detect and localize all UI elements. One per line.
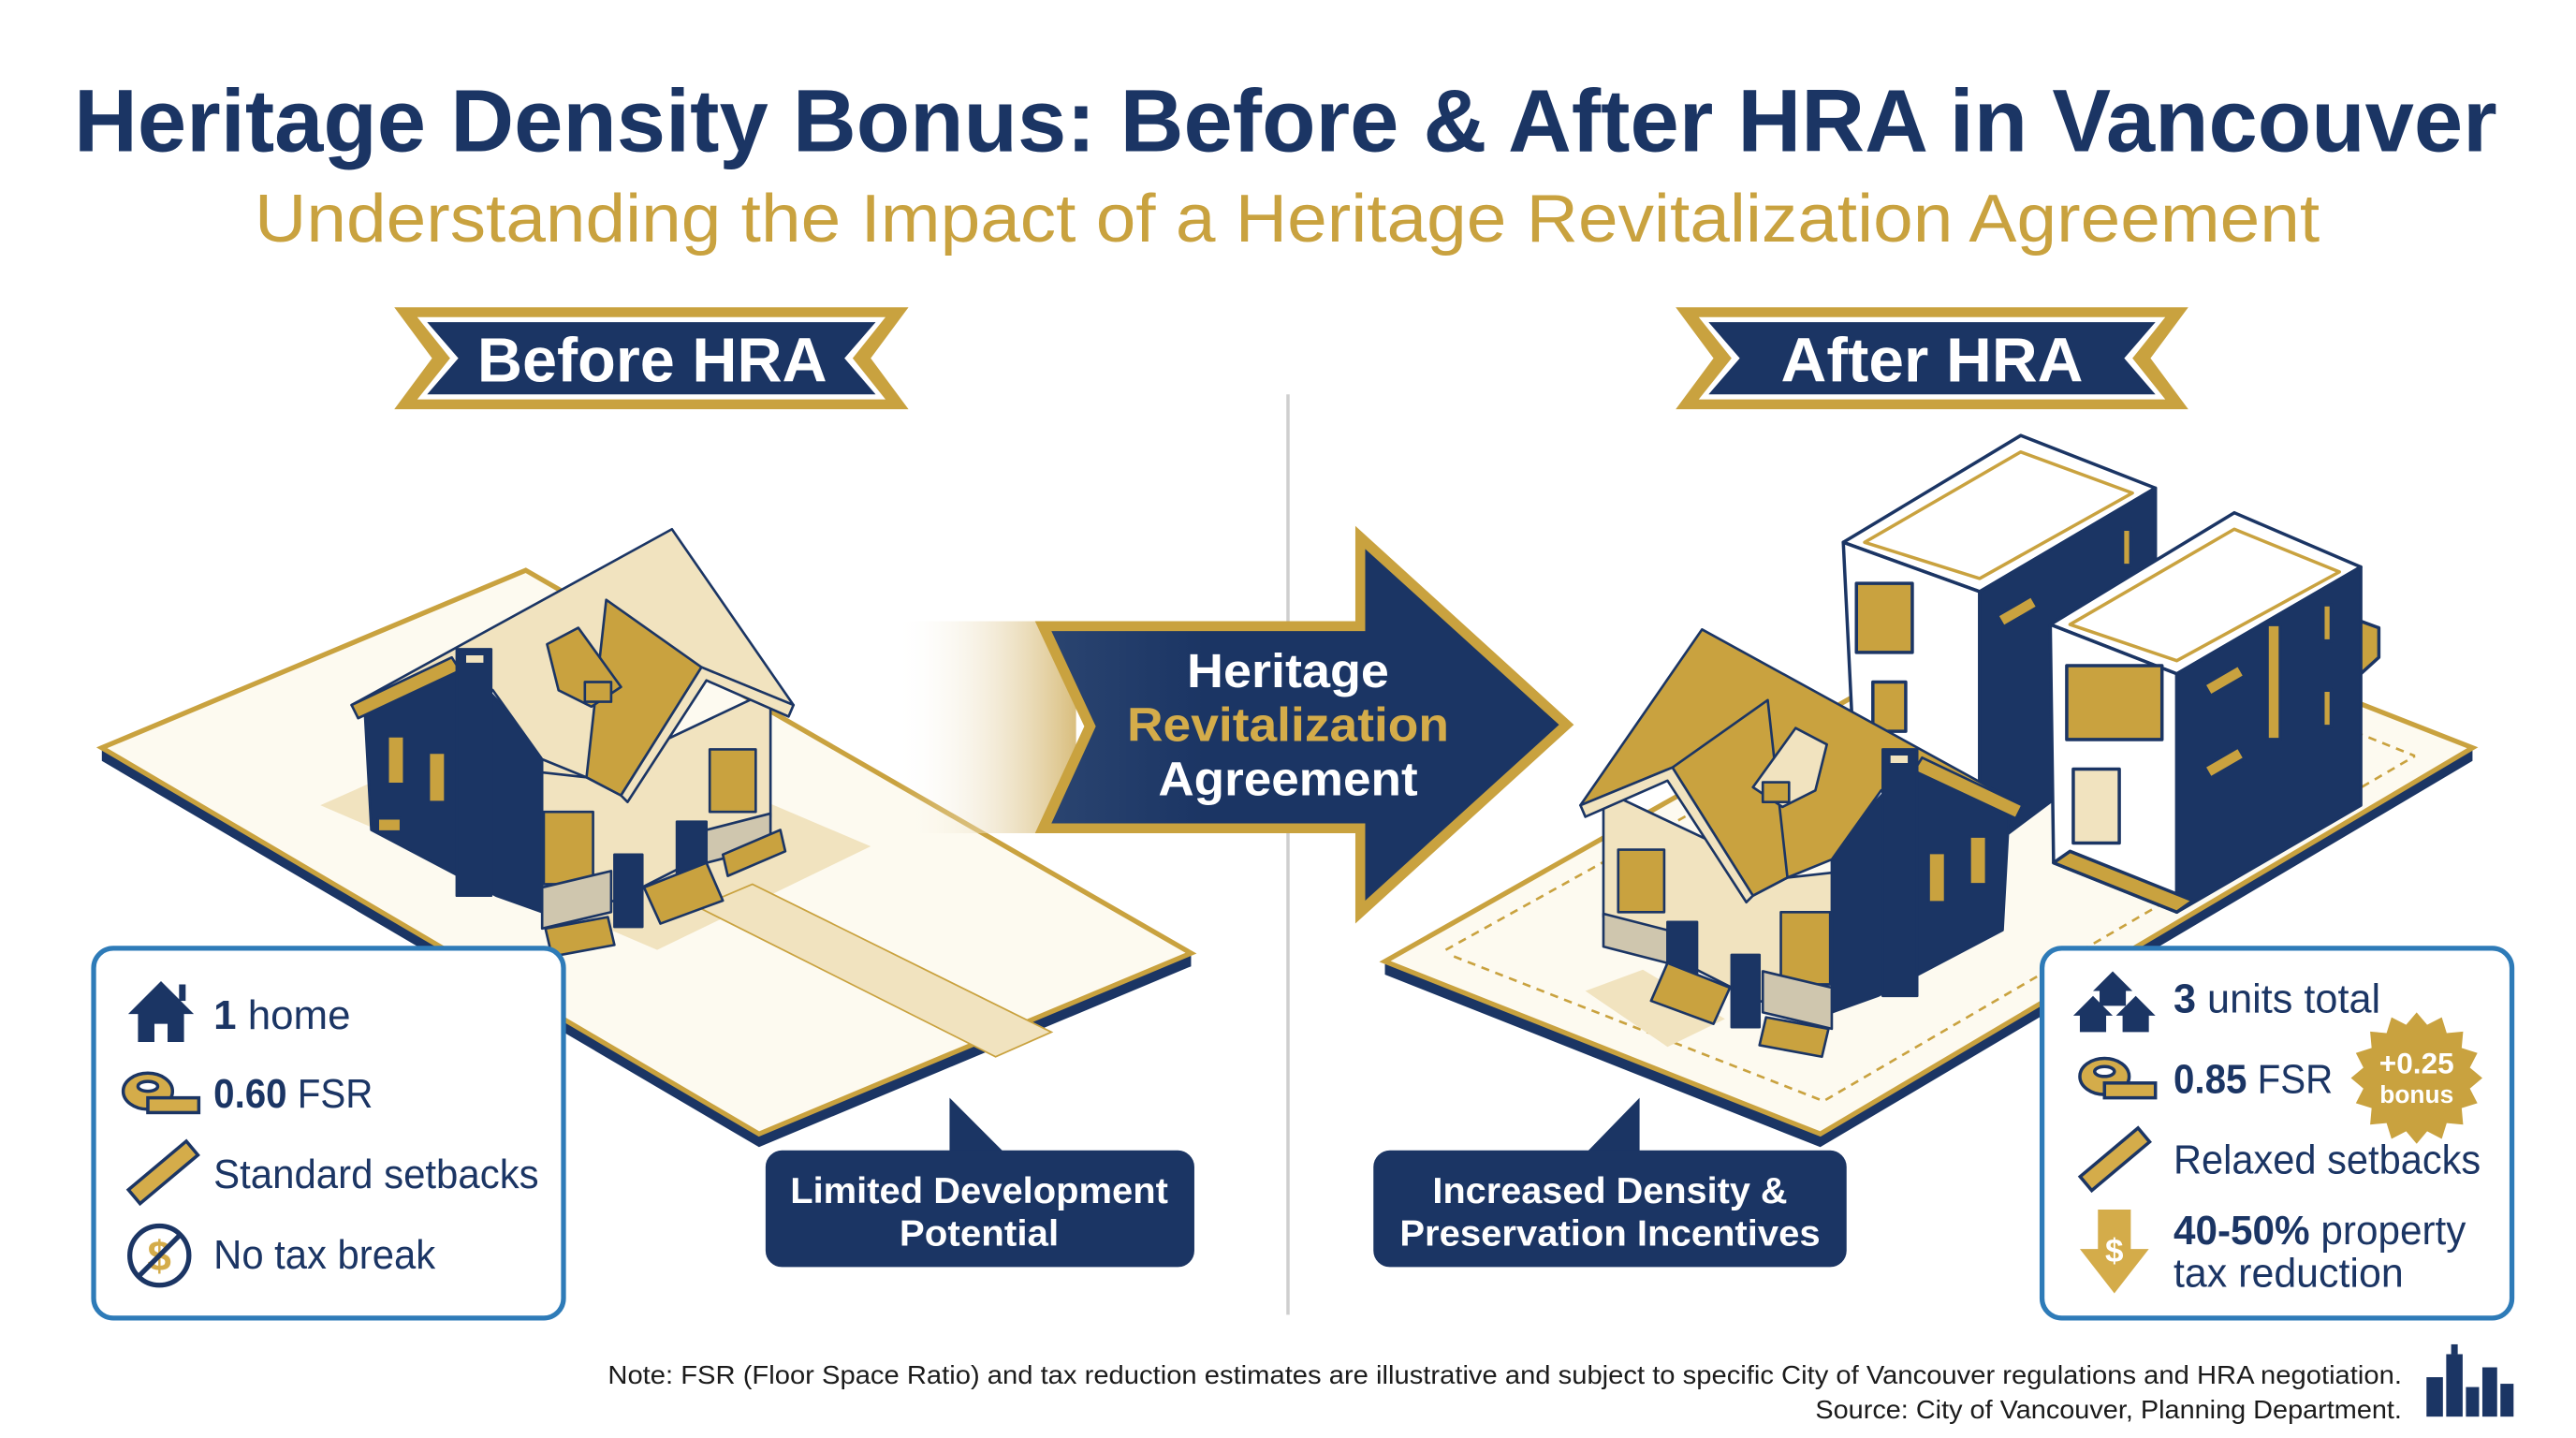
arrow: heritage revitalization agreement: Heritage: [1187, 644, 1389, 697]
icon: preserved heritage house: [1580, 629, 2023, 1057]
panel: after stats: Relaxed setbacks: [2174, 1137, 2481, 1182]
icon: modern infill buildings: [1843, 435, 2378, 912]
icon: tape measure: [124, 1073, 198, 1112]
panel: after lot illustration: [1385, 435, 2472, 1147]
footer note: Source: City of Vancouver, Planning Department.: [1815, 1395, 2402, 1424]
icon: no tax: [130, 1226, 189, 1285]
callout: limited development potential: [766, 1098, 1194, 1267]
icon: city skyline: [2426, 1344, 2513, 1416]
panel: before stats: 1 home: [213, 992, 351, 1038]
callout: increased density: [1373, 1098, 1847, 1267]
panel: before stats: [94, 948, 564, 1318]
badge: +0.25 bonus: +0.25: [2379, 1046, 2454, 1079]
icon: tax down arrow: $: [2105, 1233, 2124, 1269]
lot: [102, 570, 1191, 1147]
panel: after stats: tax reduction: [2174, 1250, 2404, 1297]
icon: ruler: [128, 1141, 198, 1204]
badge: +0.25 bonus: bonus: [2379, 1080, 2453, 1108]
panel: before lot illustration: [102, 529, 1191, 1147]
arrow: heritage revitalization agreement: Revitalization: [1127, 698, 1449, 752]
panel: after stats: 0.85 FSR: [2174, 1056, 2333, 1102]
footer note: Note: FSR (Floor Space Ratio) and tax reduction estimates are illustrative and subject to specific City of Vancouver regulations and HRA negotiation.: [607, 1360, 2402, 1389]
callout: limited development potential: Limited Development: [790, 1171, 1168, 1211]
callout: limited development potential: Potential: [900, 1214, 1059, 1255]
subtitle: Understanding the Impact of a Heritage Revitalization Agreement: [255, 182, 2320, 257]
icon: heritage house: [352, 529, 794, 957]
badge: +0.25 bonus: [2351, 1012, 2482, 1144]
title: Heritage Density Bonus: Before & After HRA in Vancouver: [74, 71, 2497, 171]
icon: tape measure: [2080, 1058, 2156, 1098]
panel: before stats: No tax break: [213, 1232, 435, 1278]
callout: increased density: Increased Density &: [1432, 1171, 1788, 1211]
icon: no tax: $: [148, 1232, 171, 1280]
banner: after HRA: After HRA: [1781, 326, 2083, 395]
icon: ruler: [2080, 1128, 2150, 1191]
banner: before HRA: Before HRA: [477, 326, 827, 395]
panel: after stats: 3 units total: [2174, 976, 2380, 1021]
banner: after HRA: [1676, 307, 2188, 409]
icon: three houses: [2073, 971, 2156, 1032]
panel: before stats: Standard setbacks: [213, 1152, 539, 1197]
panel: after stats: [2042, 948, 2512, 1318]
callout: increased density: Preservation Incentives: [1399, 1214, 1821, 1255]
panel: after stats: 40-50% property: [2174, 1208, 2466, 1254]
panel: before stats: 0.60 FSR: [213, 1071, 373, 1117]
arrow: heritage revitalization agreement: [896, 526, 1573, 924]
arrow: heritage revitalization agreement: Agreement: [1158, 753, 1418, 806]
lot: [1385, 583, 2472, 1147]
icon: house: [128, 981, 194, 1042]
icon: tax down arrow: [2080, 1210, 2149, 1294]
banner: before HRA: [394, 307, 909, 409]
footer note: [607, 1360, 2402, 1424]
